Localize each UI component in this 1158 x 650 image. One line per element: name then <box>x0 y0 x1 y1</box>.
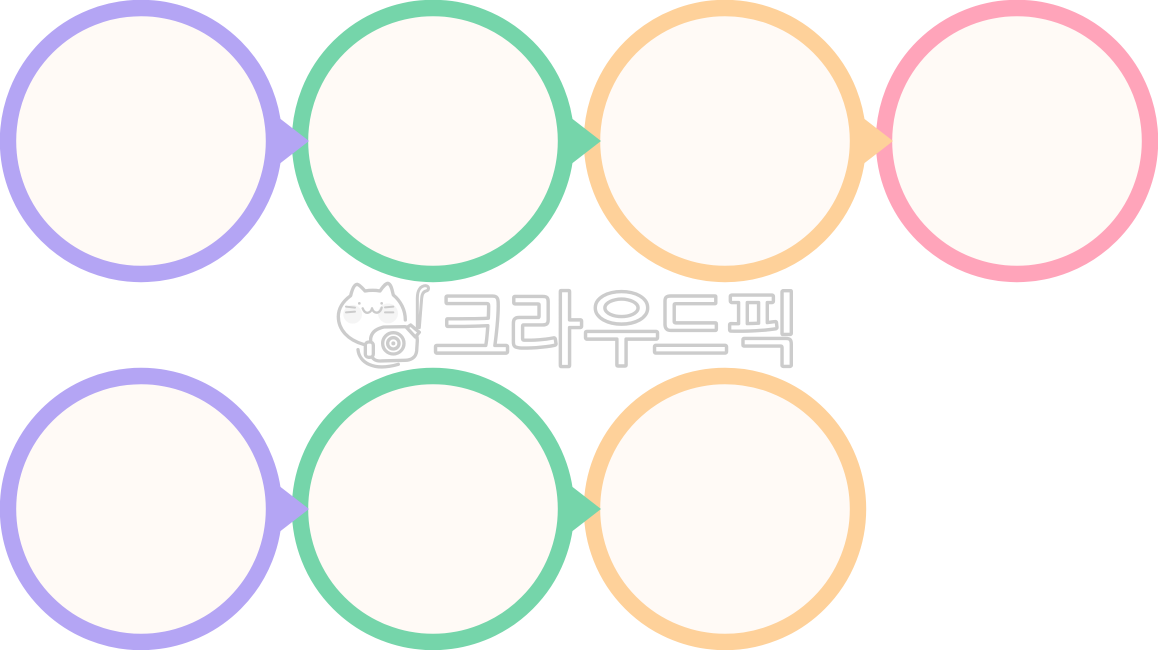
row 2 circle 3: orange <box>592 376 858 642</box>
row 1 circle 4: pink <box>884 8 1150 274</box>
arrow: green to orange <box>570 117 601 165</box>
row 1 circle 3: orange <box>592 8 858 274</box>
watermark wordmark: 크라우드픽 <box>434 286 801 375</box>
row 1 circle 1: purple <box>8 8 274 274</box>
arrow: orange to pink <box>862 117 893 165</box>
row 2 circle 1: purple <box>8 376 274 642</box>
row 1 circle 2: green <box>300 8 566 274</box>
arrow: row 2 purple to green <box>278 485 309 533</box>
arrow: row 2 green to orange <box>570 485 601 533</box>
arrow: purple to green <box>278 117 309 165</box>
icon: watermark cat with camera <box>338 283 428 367</box>
row 2 circle 2: green <box>300 376 566 642</box>
